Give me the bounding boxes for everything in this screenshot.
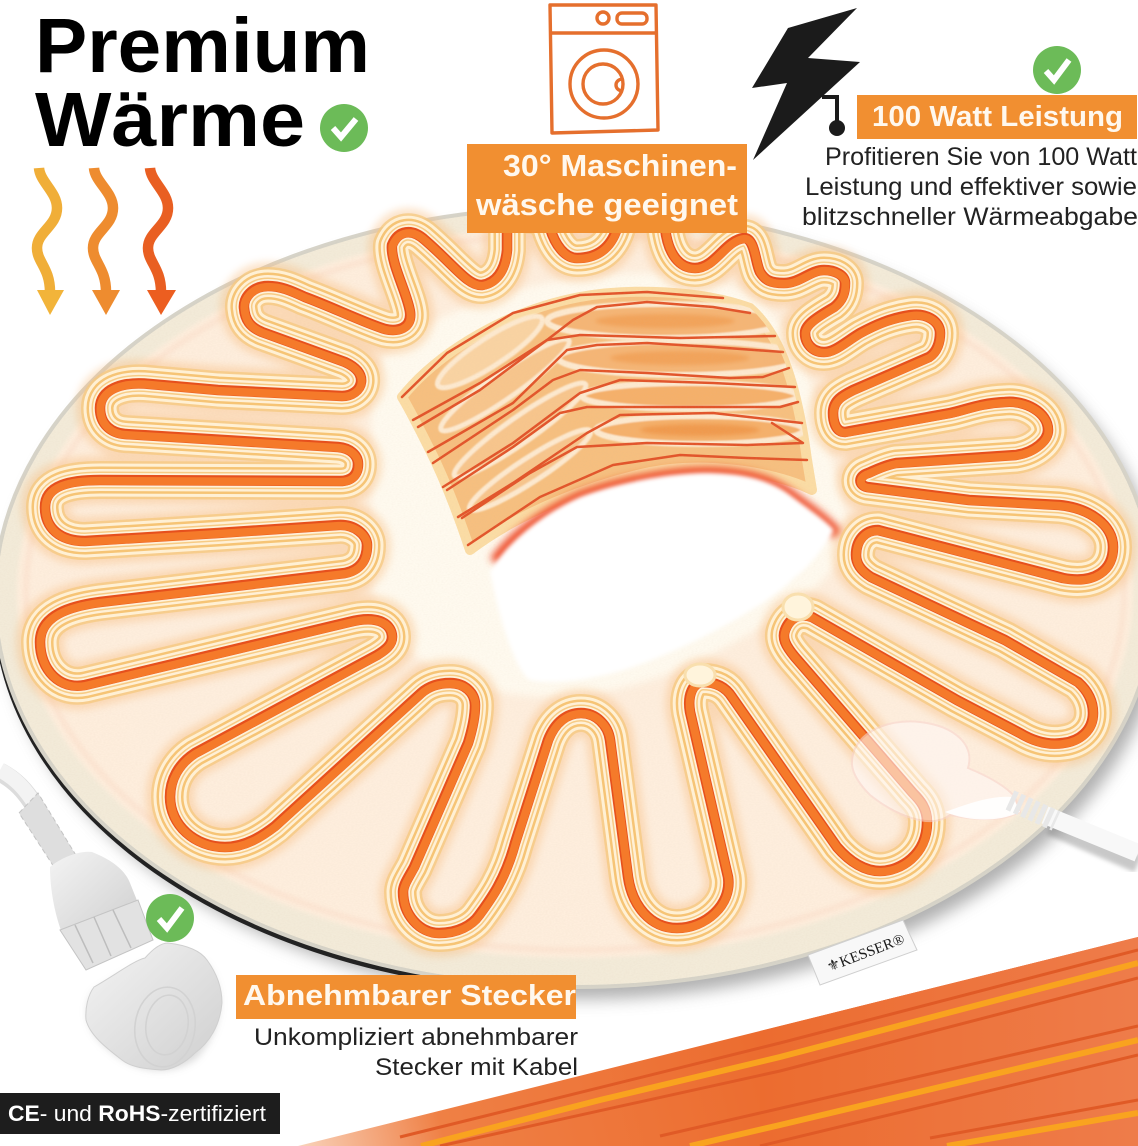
red glow at opening [495,473,838,562]
callout: 100 watt: 100 Watt Leistung [872,101,1123,133]
text: 100 watt description [802,143,1138,231]
callout: washing [467,144,747,233]
plug dial [130,983,200,1071]
heating pad [0,200,1138,1000]
plug head [86,943,222,1070]
text: detachable plug description: Stecker mit Kabel [375,1054,578,1081]
callout: detachable plug [236,975,576,1019]
title [35,3,370,163]
icon: lightning bolt [752,8,860,160]
bottom orange close-up strip [298,937,1138,1146]
plug shadow [87,957,219,1070]
kesser label tag [808,920,917,985]
detachable plug [0,770,222,1071]
callout: washing: 30° Maschinen- [503,148,737,183]
connector fins [60,900,153,970]
pad fleece surface [17,226,1133,958]
strain relief [1010,800,1056,821]
callout: 100 watt [857,95,1137,139]
certification badge: CE- und RoHS-zertifiziert [8,1101,266,1126]
cord shadow [1050,826,1138,864]
centre opening [490,473,834,682]
raised ridge around opening [371,273,847,697]
wire end caps [685,594,813,686]
arrow yellow [37,168,64,315]
callout: washing: wäsche geeignet [475,187,738,222]
text: detachable plug description [254,1024,578,1081]
icon: washing machine [550,5,658,133]
text: 100 watt description: Leistung und effektiver sowie [805,173,1137,201]
arrow red-orange [147,168,176,315]
strain relief [19,793,77,867]
warm tint along pad edge [26,234,1124,950]
icon: green check title [320,104,368,152]
connector body [945,797,1020,820]
cord [1045,815,1138,853]
pad fleece rim [0,207,1138,987]
connector body [50,852,138,933]
callout: detachable plug: Abnehmbarer Stecker [243,980,576,1012]
title: Premium [35,3,370,89]
text: detachable plug description: Unkompliziert abnehmbarer [254,1024,578,1051]
certification badge [0,1093,280,1134]
icon: heat arrows [37,168,176,315]
heating wire [40,207,1114,934]
arrow orange [92,168,120,315]
icon: green check plug [146,894,194,942]
cord [0,772,36,808]
inner heated panel [402,292,812,550]
panel heating strands [402,292,807,545]
icon: green check power [1033,46,1081,94]
fleece grain [416,301,760,516]
kesser label tag: ⚜KESSER® [825,931,907,976]
strip heating wires [400,950,1138,1146]
pad shadow [0,213,1138,999]
panel glow bands [430,304,804,519]
title: Wärme [35,77,305,163]
text: 100 watt description: Profitieren Sie von 100 Watt [825,143,1137,171]
text: 100 watt description: blitzschneller Wärmeabgabe [802,203,1138,231]
inline control connector on pad [852,721,1138,864]
